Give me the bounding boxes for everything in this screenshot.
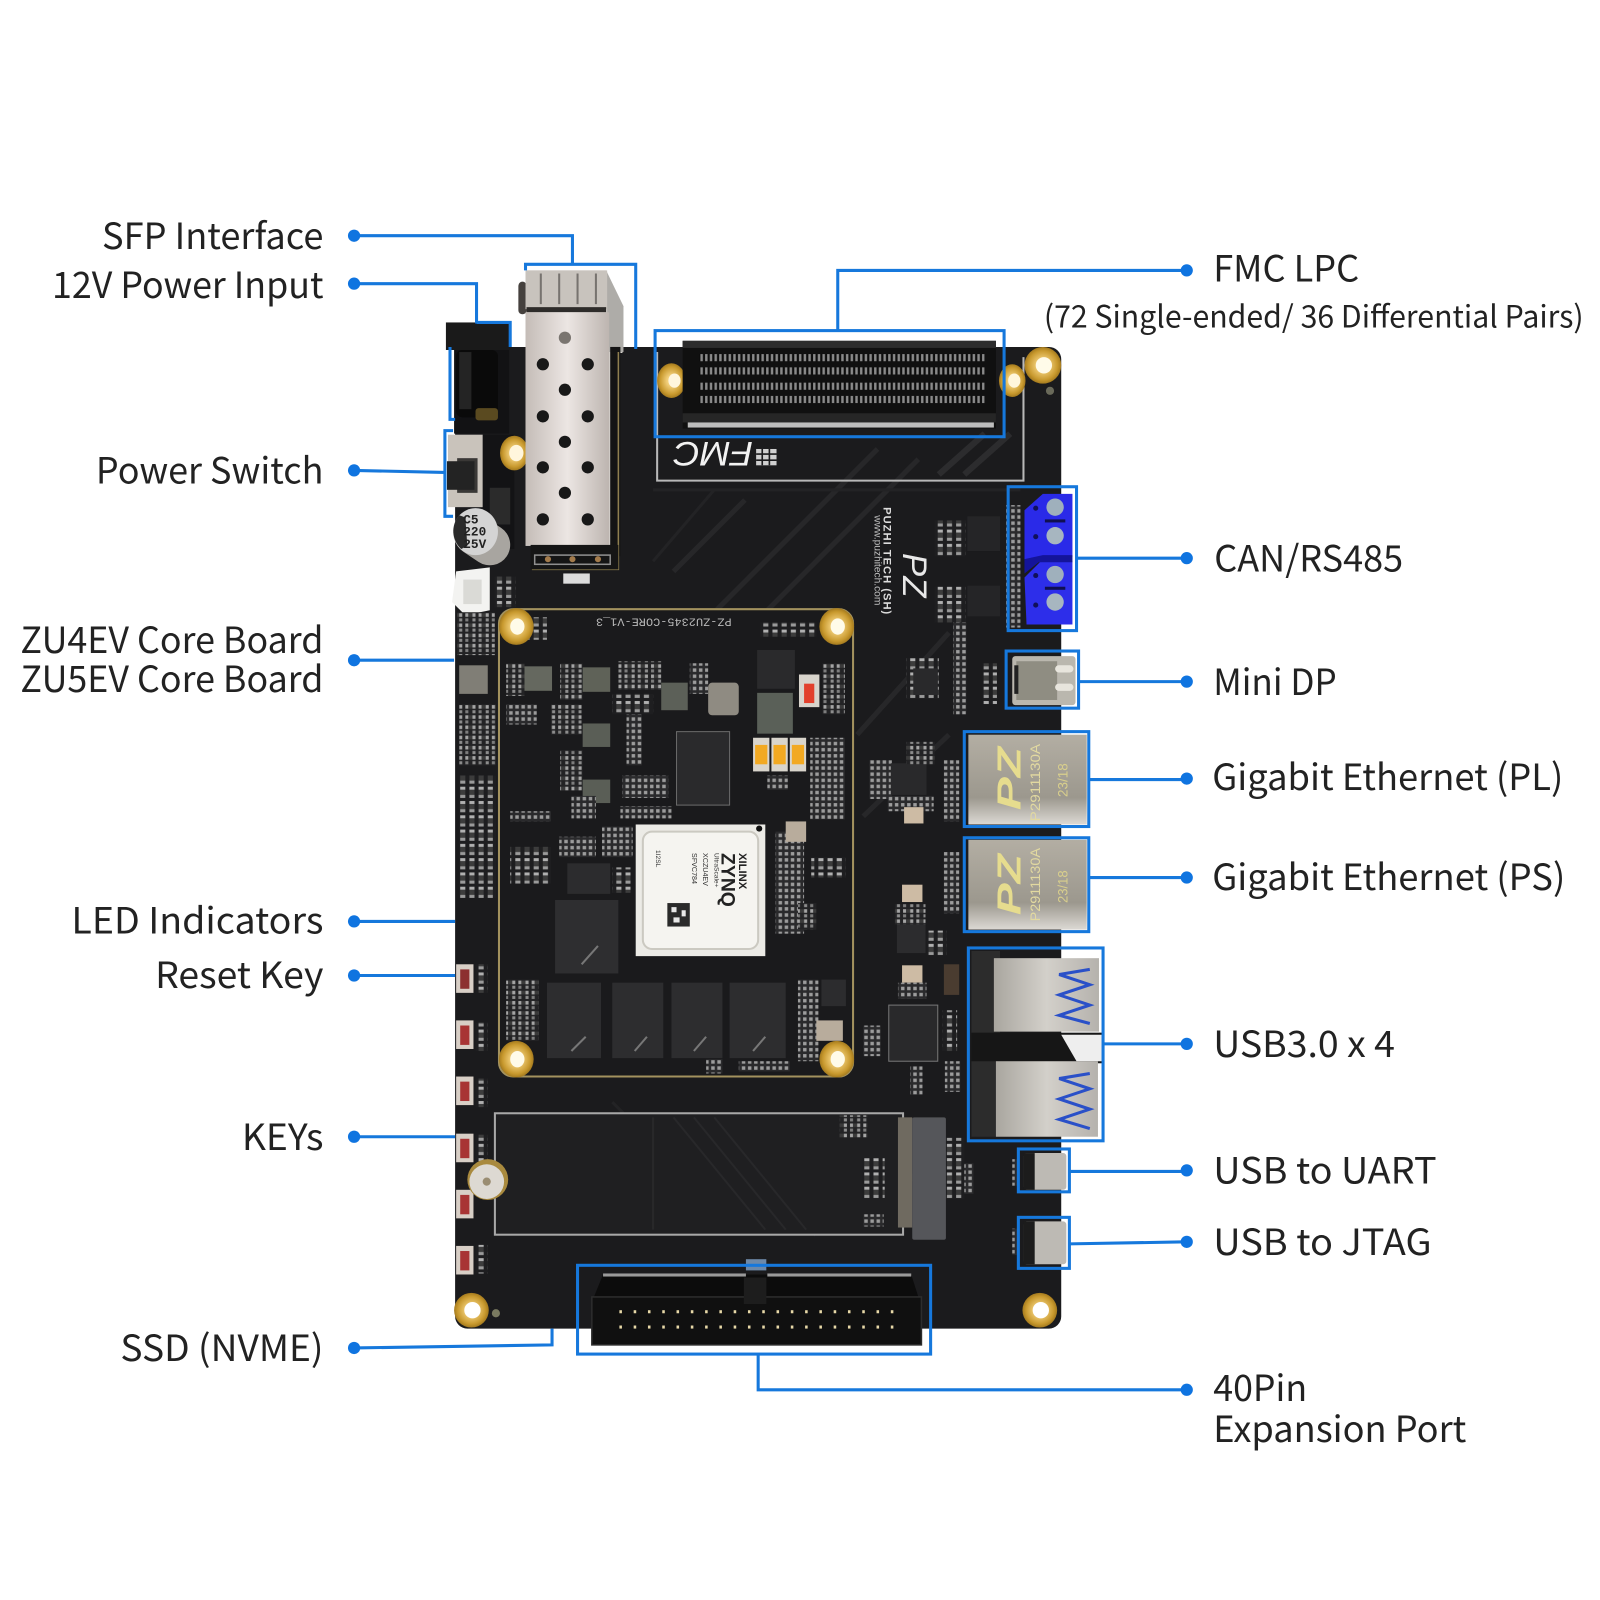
Gigabit Ethernet ports xyxy=(968,735,1087,930)
callout: FMC LPC: FMC LPC xyxy=(1213,241,1359,293)
Gigabit Ethernet ports: PZ xyxy=(991,852,1028,915)
callout: FMC LPC xyxy=(655,241,1584,437)
silkscreen brand text: www.puzhitech.com xyxy=(871,514,882,605)
callout: ZU4EV / ZU5EV Core Board: ZU4EV Core Board xyxy=(20,612,323,664)
core board module xyxy=(499,608,854,1078)
power jack xyxy=(446,322,509,434)
FMC silkscreen area xyxy=(657,352,1023,481)
callout: USB to UART: USB to UART xyxy=(1213,1143,1437,1195)
callout: Gigabit Ethernet (PS): Gigabit Ethernet (PS) xyxy=(1212,849,1565,901)
callout: Gigabit Ethernet (PL) xyxy=(964,732,1563,827)
USB-C ports xyxy=(1012,1153,1066,1264)
Zynq chip: SFVC784 xyxy=(690,853,698,884)
capacitor C5 220 25V xyxy=(453,508,498,555)
callout: KEYs xyxy=(242,1109,455,1161)
callout: 12V Power Input: 12V Power Input xyxy=(52,257,324,309)
capacitor C5 220 25V: 25V xyxy=(463,537,487,552)
callout: LED Indicators xyxy=(71,893,455,945)
Zynq chip: ZYNQ xyxy=(716,853,738,907)
callout: Power Switch: Power Switch xyxy=(96,443,323,495)
callout: SFP Interface xyxy=(102,208,636,349)
power switch xyxy=(447,435,529,549)
callout: SSD (NVME): SSD (NVME) xyxy=(120,1320,323,1372)
mounting holes on the carrier xyxy=(454,347,1061,1328)
SFP cage xyxy=(518,270,623,584)
power IC xyxy=(677,732,730,805)
USB3.0 ports xyxy=(971,951,1102,1137)
Gigabit Ethernet ports: PZ xyxy=(991,745,1028,810)
silkscreen brand text: PZ xyxy=(895,553,933,599)
callout: 40Pin Expansion Port: 40Pin xyxy=(1213,1360,1307,1412)
Zynq chip: 1I2SL xyxy=(654,850,661,868)
callout: Gigabit Ethernet (PL): Gigabit Ethernet (PL) xyxy=(1212,749,1563,801)
inductors and power parts xyxy=(506,650,845,818)
callout: USB to JTAG: USB to JTAG xyxy=(1213,1214,1432,1266)
callout: 40Pin Expansion Port xyxy=(578,1265,1467,1453)
callout: Gigabit Ethernet (PS) xyxy=(964,838,1565,932)
callout: Power Switch xyxy=(96,431,453,516)
callout: USB3.0 x 4 xyxy=(968,948,1395,1141)
flash and DDR memory chips xyxy=(547,900,786,1058)
callout: KEYs: KEYs xyxy=(242,1109,323,1161)
callout: 12V Power Input xyxy=(52,257,510,419)
callout: FMC LPC: (72 Single-ended/ 36 Differential Pairs) xyxy=(1044,292,1584,337)
keys: reset and user keys xyxy=(456,964,488,1274)
callout: USB3.0 x 4: USB3.0 x 4 xyxy=(1213,1016,1395,1068)
FMC LPC connector xyxy=(683,341,996,429)
callout: SSD (NVME) xyxy=(120,1320,552,1372)
callout: Mini DP xyxy=(1006,651,1337,708)
white connector xyxy=(452,567,515,615)
Zynq chip: XCZU4EV xyxy=(701,853,709,886)
callout: Reset Key xyxy=(155,947,455,999)
SSD M.2 slot xyxy=(467,1113,946,1240)
Gigabit Ethernet ports: P2911130A xyxy=(1028,743,1044,821)
callout: USB to UART xyxy=(1018,1143,1437,1195)
tantalum capacitors xyxy=(753,738,806,771)
silkscreen brand text xyxy=(871,507,933,615)
Zynq chip: XILINX xyxy=(736,853,748,890)
Zynq chip xyxy=(636,824,765,956)
40-pin expansion header xyxy=(592,1259,921,1345)
capacitor C5 220 25V: 220 xyxy=(463,525,486,540)
FMC silkscreen area: FMC xyxy=(672,434,753,472)
core board module: PZ-ZU2345-CORE-V1_3 xyxy=(596,614,732,626)
callout: SFP Interface: SFP Interface xyxy=(102,208,323,260)
callout: LED Indicators: LED Indicators xyxy=(71,893,323,945)
CAN/RS485 blue terminals xyxy=(1024,494,1072,624)
callout: Mini DP: Mini DP xyxy=(1213,654,1337,706)
callout: CAN/RS485 xyxy=(1008,487,1403,631)
Gigabit Ethernet ports: 23/18 xyxy=(1055,870,1071,903)
silkscreen brand text: PUZHI TECH (SH) xyxy=(881,507,893,615)
callout: CAN/RS485: CAN/RS485 xyxy=(1214,530,1403,582)
peripheral components around the core board xyxy=(457,505,1020,1199)
Gigabit Ethernet ports: 23/18 xyxy=(1055,763,1071,797)
Mini DP port xyxy=(1012,656,1076,705)
board: PCB base xyxy=(446,270,1102,1345)
callout: USB to JTAG xyxy=(1018,1214,1432,1268)
callout: Reset Key: Reset Key xyxy=(155,947,324,999)
callout: 40Pin Expansion Port: Expansion Port xyxy=(1213,1401,1467,1453)
Gigabit Ethernet ports: P2911130A xyxy=(1028,847,1044,921)
Zynq chip: UltraScale+ xyxy=(712,853,719,888)
capacitor C5 220 25V: C5 xyxy=(463,512,479,527)
callout: ZU4EV / ZU5EV Core Board xyxy=(20,612,454,703)
callout: ZU4EV / ZU5EV Core Board: ZU5EV Core Board xyxy=(20,651,323,703)
